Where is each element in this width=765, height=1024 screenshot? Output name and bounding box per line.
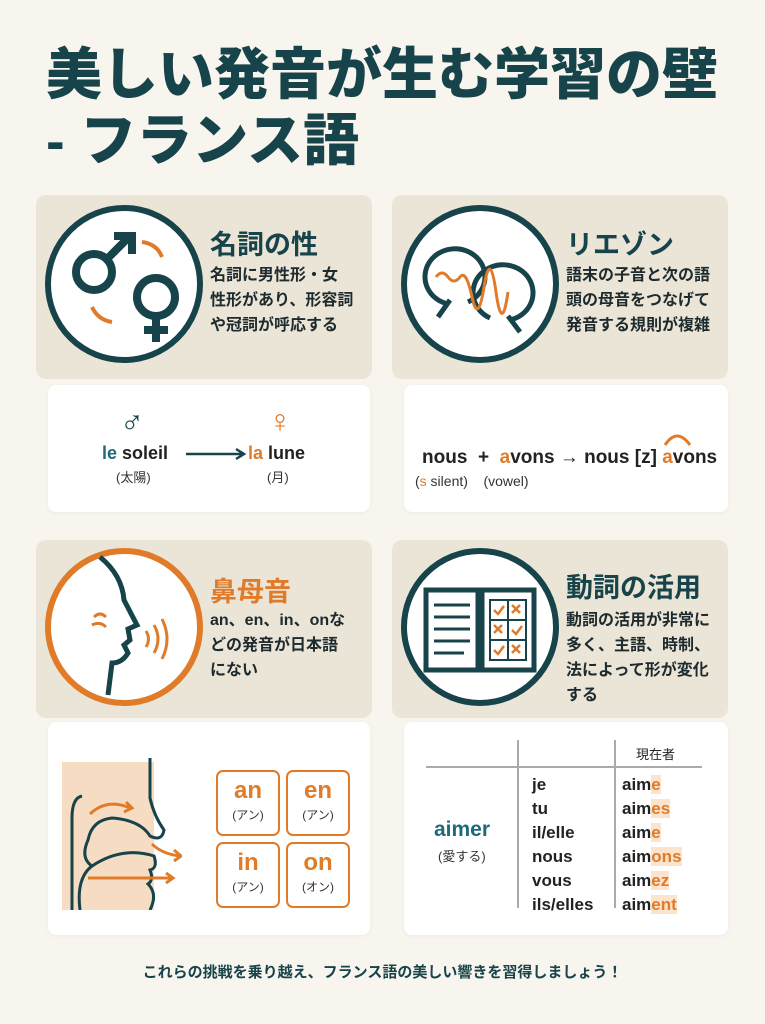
boxes: nasal vowels <box>216 770 350 908</box>
text <box>566 266 710 334</box>
text <box>566 611 710 704</box>
boxes: nasal vowels: in <box>237 849 259 876</box>
text: 発音する規則が複雑 <box>566 317 710 334</box>
icon: speech bubbles <box>401 205 559 363</box>
heading: リエゾン <box>566 230 674 260</box>
diagram: nasal airflow <box>62 758 182 910</box>
footer: これらの挑戦を乗り越え、フランス語の美しい響きを習得しましょう！ <box>143 964 622 981</box>
text: や冠詞が呼応する <box>210 317 338 334</box>
table: aimer <box>426 740 702 914</box>
icon: gender symbols <box>45 205 203 363</box>
table: aimer: je <box>532 775 546 794</box>
table: aimer: aiment <box>622 895 677 914</box>
text: an、en、in、onな <box>210 612 345 629</box>
text: にない <box>210 662 258 679</box>
table: aimer: aime <box>622 823 661 842</box>
text: する <box>566 687 598 704</box>
table: aimer: il/elle <box>532 823 575 842</box>
text: 法によって形が変化 <box>566 662 709 679</box>
boxes: nasal vowels: on <box>303 849 333 876</box>
title: 美しい発音が生む学習の壁 <box>46 43 718 106</box>
card: liaison example <box>404 385 728 512</box>
example: le soleil / la lune: (太陽) <box>116 470 151 485</box>
example: le soleil / la lune: la lune <box>248 443 305 463</box>
table: aimer: aimez <box>622 871 669 890</box>
boxes: nasal vowels: (アン) <box>232 808 264 822</box>
table: aimer: aimons <box>622 847 682 866</box>
table: aimer: aimes <box>622 799 670 818</box>
text: 語末の子音と次の語 <box>566 267 710 284</box>
table: aimer: aimer <box>434 818 490 841</box>
example: nous avons: nous + avons → nous [z] avons <box>422 447 717 468</box>
panel: noun gender <box>36 195 372 379</box>
title <box>46 43 718 172</box>
example: le soleil / la lune: (月) <box>267 470 289 485</box>
text: どの発音が日本語 <box>210 637 338 654</box>
heading: 名詞の性 <box>210 230 318 260</box>
boxes: nasal vowels: (アン) <box>302 808 334 822</box>
card: conjugation table <box>404 722 728 935</box>
table: aimer: aime <box>622 775 661 794</box>
card: nasal diagram <box>48 722 370 935</box>
icon: book <box>401 548 559 706</box>
table: aimer: 現在者 <box>636 747 675 762</box>
boxes: nasal vowels: en <box>304 777 332 804</box>
boxes: nasal vowels: (オン) <box>302 880 334 894</box>
panel: liaison <box>392 195 728 379</box>
text: 多く、主語、時制、 <box>566 637 710 654</box>
table: aimer: tu <box>532 799 548 818</box>
text: 名詞に男性形・女 <box>210 267 338 284</box>
text: 頭の母音をつなげて <box>566 292 710 309</box>
example: le soleil / la lune <box>102 403 305 485</box>
example: nous avons: (s silent) (vowel) <box>415 473 529 489</box>
table: aimer: ils/elles <box>532 895 593 914</box>
heading: 動詞の活用 <box>566 573 701 603</box>
panel: nasal vowels <box>36 540 372 718</box>
boxes: nasal vowels: (アン) <box>232 880 264 894</box>
boxes: nasal vowels: an <box>234 777 262 804</box>
icon: face profile <box>45 548 203 706</box>
example: le soleil / la lune: le soleil <box>102 443 168 463</box>
table: aimer: nous <box>532 847 573 866</box>
panel: verb conjugation <box>392 540 728 718</box>
text: 性形があり、形容詞 <box>210 292 353 309</box>
example: le soleil / la lune: ♀ <box>268 403 292 439</box>
table: aimer: (愛する) <box>438 849 486 864</box>
card: gender example <box>48 385 370 512</box>
table: aimer: vous <box>532 871 572 890</box>
example: nous avons <box>415 434 717 489</box>
text: 動詞の活用が非常に <box>566 612 710 629</box>
text <box>210 612 345 679</box>
example: le soleil / la lune: ♂ <box>120 403 144 439</box>
heading: 鼻母音 <box>210 577 291 607</box>
title: - フランス語 <box>46 109 359 172</box>
text <box>210 266 353 334</box>
